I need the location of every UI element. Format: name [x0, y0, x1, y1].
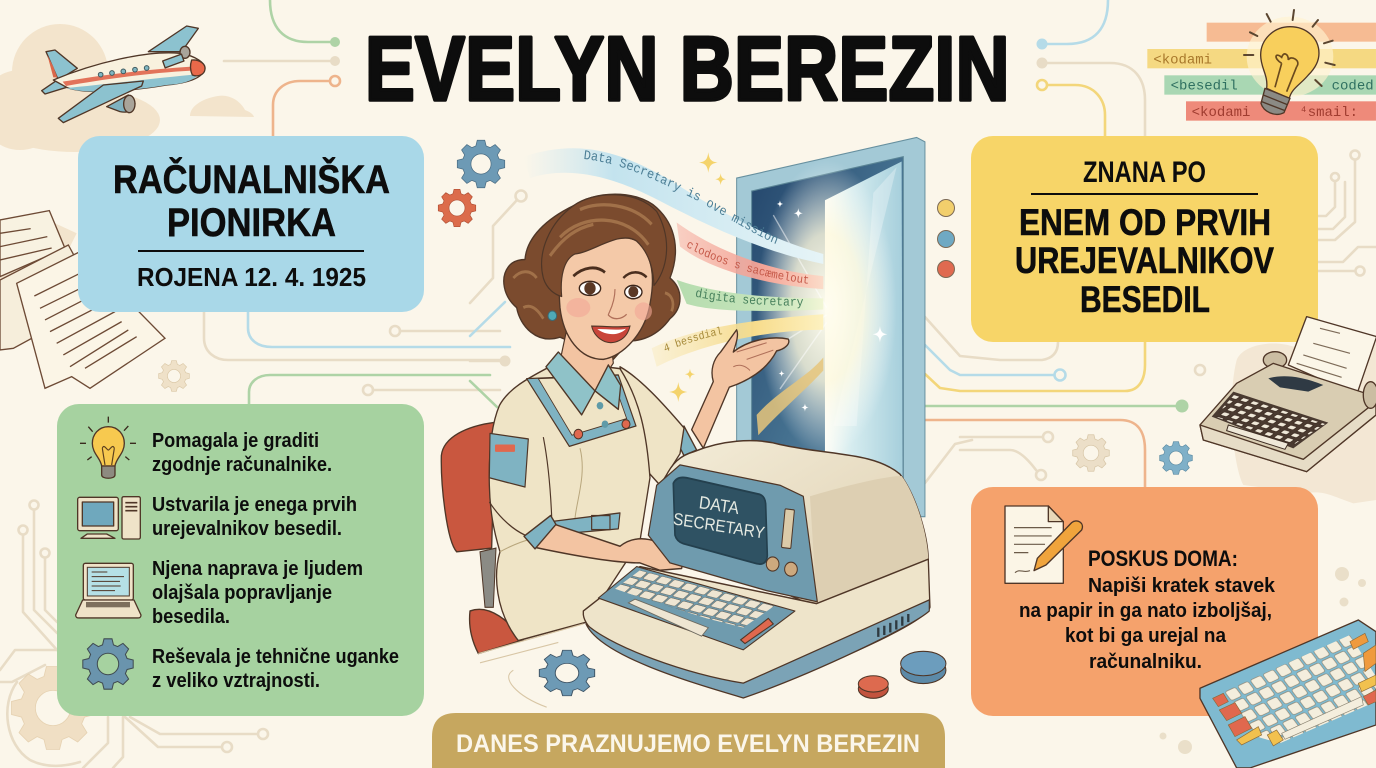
icon: light bulb with code strips	[1147, 10, 1376, 121]
text: word processor	[152, 494, 357, 540]
icon: gear	[83, 639, 133, 689]
text: puzzles: Reševala je tehnične uganke	[152, 646, 399, 668]
code strips: <kodami	[1192, 105, 1250, 121]
heading: pioneer	[113, 156, 390, 245]
panel: achievements	[57, 404, 424, 716]
woman: dress	[489, 330, 650, 641]
icon: colourful keyboard	[1200, 620, 1376, 768]
code strips: <kodami	[1153, 52, 1212, 68]
icon: laptop	[76, 563, 141, 618]
text: puzzles: z veliko vztrajnosti.	[152, 670, 320, 692]
code strips: ⁴smail:	[1299, 105, 1358, 121]
text: try at home	[1019, 546, 1276, 673]
data streams: Data Secretary is ove mission	[584, 150, 778, 244]
woman: back hair	[504, 194, 680, 359]
banner	[432, 713, 945, 768]
text: easier editing: Njena naprava je ljudem	[152, 558, 363, 580]
panel: pioneer	[78, 136, 424, 312]
doorway	[737, 137, 925, 517]
computer: DATA	[698, 492, 741, 518]
data streams	[488, 148, 826, 476]
code strips	[1147, 23, 1376, 121]
button: red	[858, 676, 888, 698]
panel: try at home	[971, 487, 1318, 716]
icon: paper and pen	[1005, 506, 1082, 583]
banner text: DANES PRAZNUJEMO EVELYN BEREZIN	[456, 730, 920, 758]
known for text	[1015, 202, 1274, 320]
computer	[583, 441, 930, 698]
icon: stack of papers	[0, 211, 165, 388]
indicator dots	[938, 200, 954, 278]
text: easier editing: olajšala popravljanje	[152, 582, 332, 604]
known for text: UREJEVALNIKOV	[1015, 240, 1274, 281]
icon: airplane	[42, 26, 205, 123]
text: early computers: Pomagala je graditi	[152, 430, 319, 452]
text: word processor: Ustvarila je enega prvih	[152, 494, 357, 516]
known for text: ENEM OD PRVIH	[1019, 202, 1271, 243]
computer: SECRETARY	[672, 510, 766, 543]
text: easier editing: besedila.	[152, 606, 230, 628]
text: try at home: Napiši kratek stavek	[1088, 574, 1276, 597]
birth date: ROJENA 12. 4. 1925	[137, 262, 366, 292]
title: EVELYN BEREZIN	[365, 18, 1010, 120]
code strips: <besedil	[1171, 78, 1238, 94]
desk gear	[539, 650, 595, 696]
gears center	[438, 140, 505, 227]
data streams: clodoos s sacæmelout	[687, 242, 808, 284]
text: word processor: urejevalnikov besedil.	[152, 518, 342, 540]
woman: lower arm	[524, 516, 683, 570]
text: early computers	[152, 430, 332, 476]
text: try at home: POSKUS DOMA:	[1088, 546, 1238, 571]
known for label: ZNANA PO	[1083, 156, 1206, 189]
small gears background left	[12, 361, 189, 749]
central illustration	[440, 136, 946, 735]
text: easier editing	[152, 558, 363, 628]
text: try at home: računalniku.	[1089, 650, 1202, 673]
known for text: BESEDIL	[1080, 279, 1210, 320]
decorative dots	[1160, 567, 1366, 754]
chair	[441, 422, 523, 654]
code strips: coded	[1332, 78, 1374, 94]
woman: arm gesturing	[620, 330, 789, 485]
icon: typewriter	[1200, 317, 1376, 503]
sparkles	[669, 152, 726, 402]
gears right	[1073, 435, 1192, 474]
text: early computers: zgodnje računalnike.	[152, 454, 332, 476]
button: blue	[901, 651, 946, 684]
panel: known for	[971, 136, 1318, 342]
icon: desktop computer	[78, 497, 140, 539]
desk lines	[478, 624, 583, 707]
data streams: digita secretary	[696, 288, 803, 308]
data streams: 4 bessdial	[664, 326, 722, 350]
text: puzzles	[152, 646, 399, 692]
icon: light bulb small	[80, 417, 136, 478]
heading: pioneer: RAČUNALNIŠKA	[113, 156, 390, 202]
text: try at home: na papir in ga nato izboljšaj,	[1019, 599, 1272, 622]
cloud backdrop top left	[0, 24, 254, 152]
woman: face	[513, 195, 673, 359]
text: try at home: kot bi ga urejal na	[1065, 624, 1227, 647]
heading: pioneer: PIONIRKA	[167, 201, 336, 245]
